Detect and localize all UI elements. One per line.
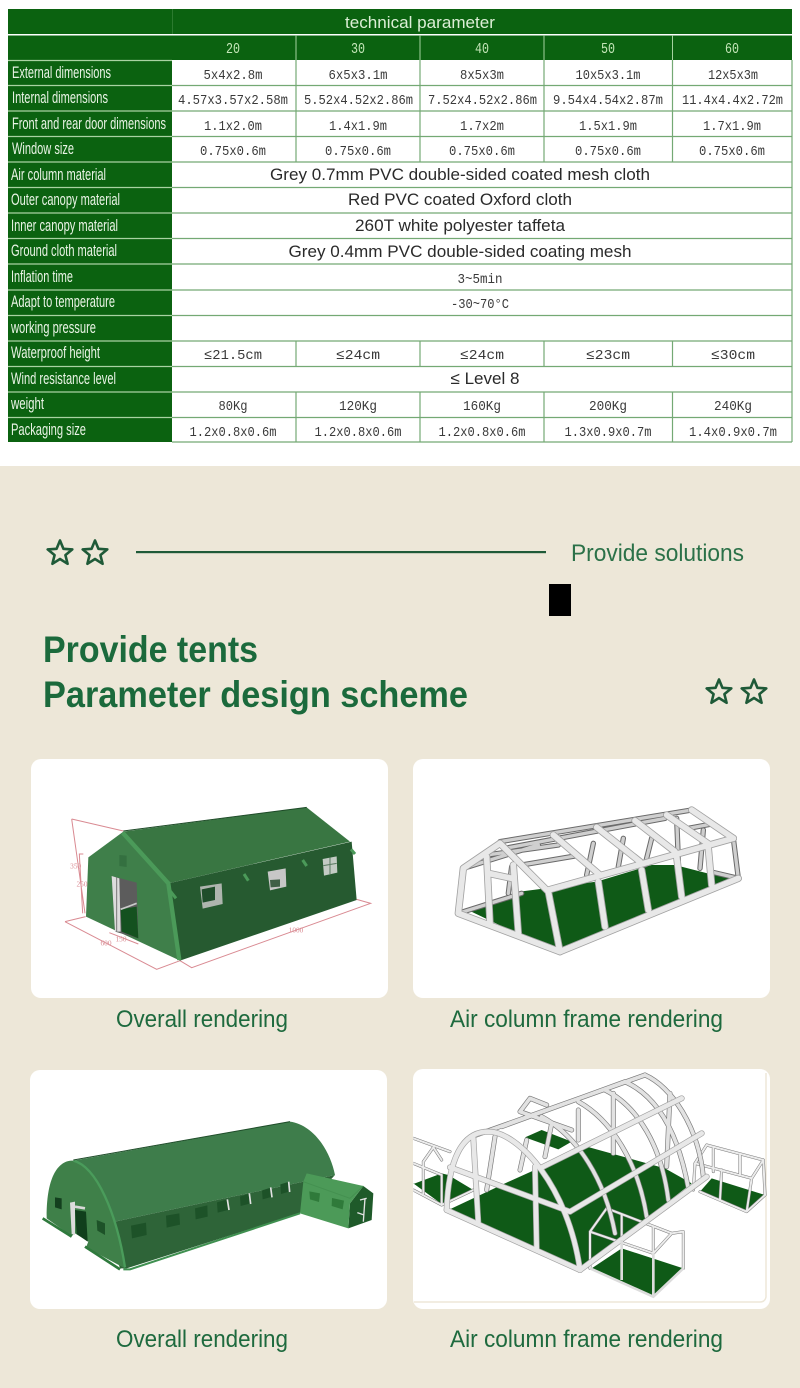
row: weight: 240Kg [714, 399, 752, 415]
panel: overall rendering, gabled tent [31, 759, 388, 998]
left label column: Inner canopy material [11, 217, 118, 235]
panel: air column frame rendering, arched [413, 1069, 770, 1309]
left label column: Ground cloth material [11, 242, 117, 260]
illustration: gabled tent with dimensions: 250 [76, 880, 88, 889]
row: internal dimensions: 7.52x4.52x2.86m [428, 93, 537, 109]
caption: Air column frame rendering [450, 1006, 723, 1033]
row: internal dimensions: 11.4x4.4x2.72m [682, 93, 783, 109]
row: packaging size: 1.3x0.9x0.7m [564, 425, 652, 441]
row: packaging size: 1.2x0.8x0.6m [190, 425, 276, 441]
table grid lines [172, 60, 792, 442]
illustration: gabled tent with dimensions: 1000 [289, 925, 304, 934]
row: weight: 80Kg [218, 399, 248, 415]
black block [549, 584, 571, 616]
row: window size [200, 144, 765, 160]
illustration: gabled tent with dimensions: 350 [70, 862, 81, 871]
illustration: gabled tent with dimensions: 150 [115, 934, 127, 943]
row: waterproof height: ≤23cm [586, 348, 630, 364]
row: door dimensions: 1.7x1.9m [703, 119, 761, 135]
row: waterproof height: ≤24cm [460, 348, 504, 364]
row: waterproof height: ≤21.5cm [204, 348, 262, 364]
rows: merged material values: Red PVC coated Oxford cloth [348, 190, 572, 209]
row: packaging size: 1.2x0.8x0.6m [438, 425, 526, 441]
divider line [136, 551, 546, 553]
row: waterproof height: ≤30cm [711, 348, 755, 364]
row: weight: 200Kg [589, 399, 627, 415]
row: window size: 0.75x0.6m [200, 144, 266, 160]
left label column: weight [10, 395, 44, 413]
row: internal dimensions [178, 93, 783, 109]
table heading bar: technical parameter [345, 13, 495, 32]
row: waterproof height [204, 348, 755, 364]
illustration: gabled tent with dimensions: 600 [100, 938, 112, 947]
rows: inflation time and temperature: -30~70°C [451, 297, 509, 313]
illustration: arched air frame with annexes [413, 1075, 765, 1297]
row: door dimensions: 1.7x2m [460, 119, 504, 135]
left label column: Front and rear door dimensions [12, 115, 166, 133]
heading: Parameter design scheme [43, 674, 468, 715]
row: external dimensions: 8x5x3m [460, 68, 504, 84]
caption: Air column frame rendering [450, 1326, 723, 1353]
row: window size: 0.75x0.6m [699, 144, 765, 160]
caption: Overall rendering [116, 1006, 288, 1033]
left label column: Adapt to temperature [11, 293, 115, 311]
rows: merged material values: Grey 0.4mm PVC double-sided coating mesh [288, 242, 632, 261]
row: window size: 0.75x0.6m [449, 144, 515, 160]
row: weight: 120Kg [339, 399, 377, 415]
model header row: 50 [601, 41, 615, 58]
panel: technical parameter table [8, 9, 792, 442]
row: external dimensions [204, 68, 758, 84]
model header row: 40 [475, 41, 489, 58]
rows: merged material values [270, 165, 650, 261]
row: packaging size [190, 425, 777, 441]
rows: inflation time and temperature: 3~5min [458, 272, 502, 288]
illustration: arched tent with annex [43, 1122, 373, 1269]
left label column: External dimensions [12, 64, 111, 82]
left label column [8, 60, 172, 442]
left label column: Waterproof height [11, 344, 100, 362]
left label column: Window size [12, 140, 74, 158]
subheading: Provide solutions [571, 540, 744, 567]
row: wind resistance: ≤ Level 8 [450, 369, 520, 388]
row: window size: 0.75x0.6m [325, 144, 391, 160]
row: internal dimensions: 5.52x4.52x2.86m [304, 93, 413, 109]
row: door dimensions: 1.4x1.9m [329, 119, 387, 135]
row: door dimensions: 1.5x1.9m [579, 119, 637, 135]
icon: two stars right [707, 680, 766, 703]
model header row [8, 35, 792, 60]
panel: cream lower section [0, 466, 800, 1388]
left label column: Outer canopy material [11, 191, 120, 209]
left label column: Air column material [11, 166, 106, 184]
row: door dimensions [204, 119, 761, 135]
left label column: Packaging size [11, 421, 86, 439]
caption: Overall rendering [116, 1326, 288, 1353]
model header row: 20 [226, 41, 240, 58]
heading [43, 629, 468, 715]
row: packaging size: 1.2x0.8x0.6m [314, 425, 402, 441]
model header row: 30 [351, 41, 365, 58]
rows: inflation time and temperature [451, 272, 509, 313]
rows: merged material values: Grey 0.7mm PVC double-sided coated mesh cloth [270, 165, 650, 184]
left label column: Wind resistance level [11, 370, 116, 388]
row: external dimensions: 6x5x3.1m [328, 68, 388, 84]
left label column: working pressure [10, 319, 96, 337]
row: packaging size: 1.4x0.9x0.7m [689, 425, 777, 441]
panel: overall rendering, arched tent [30, 1070, 387, 1309]
left label column: Inflation time [11, 268, 73, 286]
row: external dimensions: 12x5x3m [708, 68, 758, 84]
row: weight [218, 399, 752, 415]
rows: merged material values: 260T white polyester taffeta [355, 216, 566, 235]
row: waterproof height: ≤24cm [336, 348, 380, 364]
row: weight: 160Kg [463, 399, 501, 415]
row: door dimensions: 1.1x2.0m [204, 119, 262, 135]
row: window size: 0.75x0.6m [575, 144, 641, 160]
model header row: 60 [725, 41, 739, 58]
panel: air column frame rendering, gabled [413, 759, 770, 998]
illustration: gabled tent with dimensions [65, 807, 371, 969]
table heading bar [8, 9, 792, 34]
row: external dimensions: 10x5x3.1m [576, 68, 640, 84]
page background top [0, 0, 800, 466]
left label column: Internal dimensions [12, 89, 108, 107]
row: internal dimensions: 4.57x3.57x2.58m [178, 93, 288, 109]
row: internal dimensions: 9.54x4.54x2.87m [553, 93, 663, 109]
heading: Provide tents [43, 629, 258, 670]
illustration: gabled air frame [458, 810, 738, 954]
row: external dimensions: 5x4x2.8m [204, 68, 262, 84]
icon: two stars left [48, 540, 107, 564]
